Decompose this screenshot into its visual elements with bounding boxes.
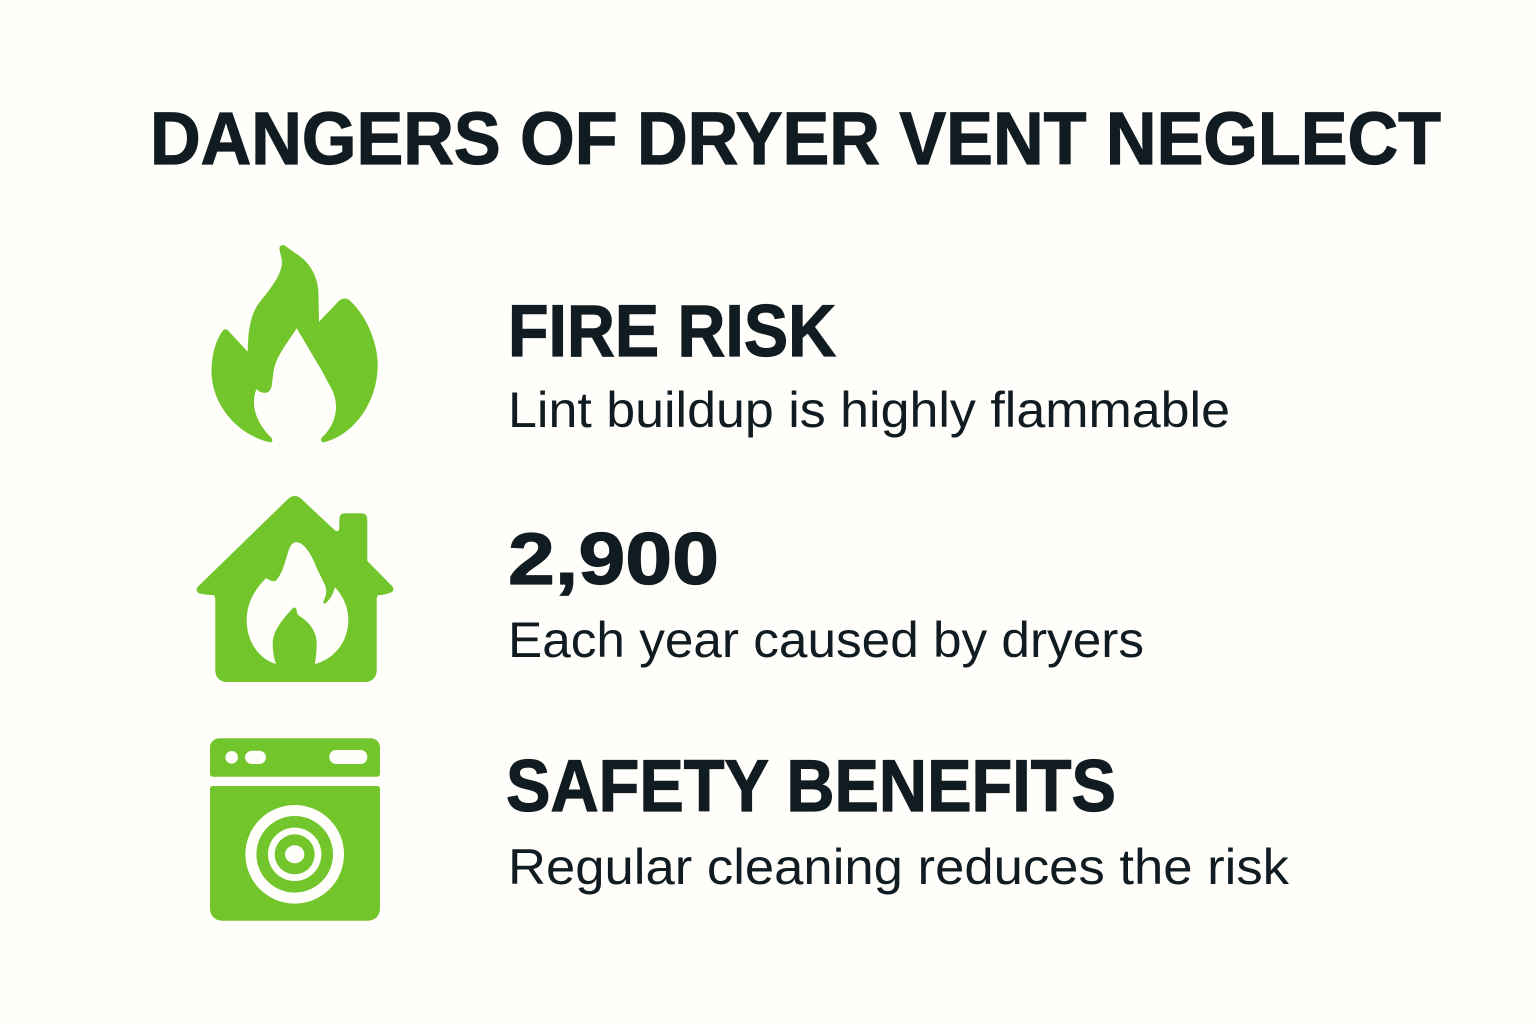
title: DANGERS OF DRYER VENT NEGLECT: [150, 97, 1441, 180]
dryer body: [210, 786, 380, 921]
number: 2,900: 2,900: [508, 519, 719, 600]
icon: dryer: [210, 738, 380, 921]
text: safety benefits description: Regular cleaning reduces the risk: [508, 839, 1290, 895]
row: fire risk: [211, 245, 1230, 442]
dryer drum: [245, 805, 344, 904]
dryer control panel: [210, 738, 380, 777]
text: annual fires description: Each year caused by dryers: [508, 612, 1144, 668]
row: safety benefits: [210, 738, 1290, 921]
icon: flame: [211, 245, 378, 442]
text: fire risk description: Lint buildup is highly flammable: [508, 382, 1230, 438]
heading: safety benefits: SAFETY BENEFITS: [506, 746, 1116, 827]
heading: fire risk: FIRE RISK: [508, 291, 836, 372]
icon: house on fire: [197, 496, 393, 682]
row: annual fires: [197, 496, 1144, 682]
